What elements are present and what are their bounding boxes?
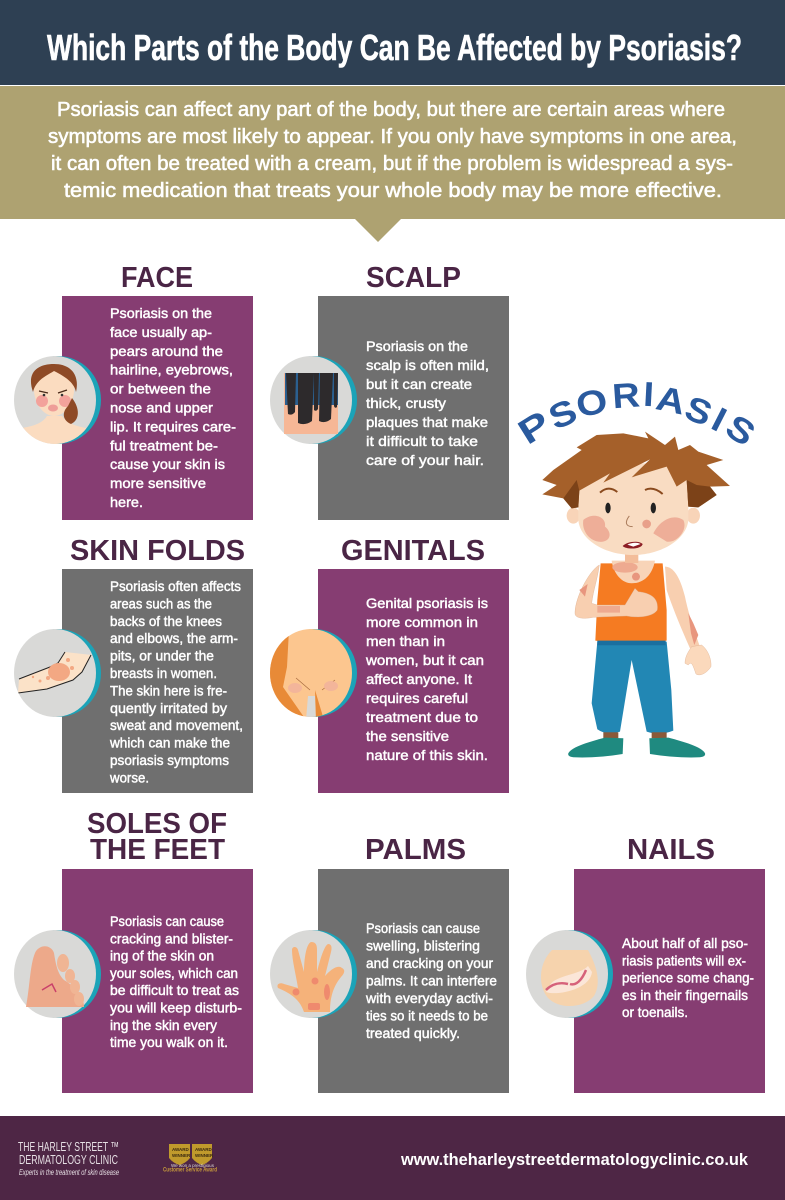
text: genitals: nature of this skin. [366, 747, 488, 763]
text: skin folds: breasts in women. [110, 665, 217, 681]
text: face: or between the [110, 381, 211, 397]
text: genitals: the sensitive [366, 728, 449, 744]
panel: scalp [270, 262, 509, 520]
icon: genitals [270, 629, 357, 720]
intro text: it can often be treated with a cream, but if the problem is widespread a sys- [51, 153, 733, 175]
illustration: boy with psoriasis [511, 374, 762, 757]
award badges: We won a prestigious [171, 1163, 215, 1168]
text: soles of the feet: you will keep disturb- [110, 1000, 242, 1016]
text: soles of the feet: cracking and blister- [110, 930, 233, 946]
text: face: more sensitive [110, 475, 206, 491]
arm and hand [575, 565, 658, 618]
text: palms: and cracking on your [366, 955, 493, 971]
footer [0, 1116, 785, 1200]
curved word: psoriasis: R [611, 375, 641, 416]
text: scalp: care of your hair. [366, 452, 484, 468]
text: palms: swelling, blistering [366, 938, 480, 954]
text: skin folds: backs of the knees [110, 613, 222, 629]
text: face: here. [110, 494, 143, 510]
panel: nails [526, 834, 765, 1093]
website url: www.theharleystreetdermatologyclinic.co.uk [400, 1151, 749, 1169]
text: skin folds [109, 578, 243, 785]
heading: genitals: GENITALS [341, 535, 485, 567]
text: face: nose and upper [110, 400, 213, 416]
curved word: psoriasis: P [511, 403, 557, 452]
header band [0, 0, 785, 85]
text: palms: treated quickly. [366, 1025, 460, 1041]
text: face: lip. It requires care- [110, 418, 236, 434]
text: face: hairline, eyebrows, [110, 362, 233, 378]
text: scalp: Psoriasis on the [366, 338, 468, 354]
clinic logo: THE HARLEY STREET ™ [18, 1139, 119, 1154]
text: genitals: affect anyone. It [366, 671, 472, 687]
intro text: symptoms are most likely to appear. If you only have symptoms in one area, [48, 126, 737, 148]
curved word: psoriasis [511, 374, 762, 454]
heading: soles of the feet: THE FEET [90, 834, 225, 866]
text: nails: perience some chang- [622, 970, 754, 986]
text: palms: with everyday activi- [365, 990, 493, 1006]
intro text: Psoriasis can affect any part of the body, but there are certain areas where [57, 99, 725, 121]
panel: genitals [270, 535, 509, 793]
curved word: psoriasis: S [543, 391, 582, 437]
text: genitals: treatment due to [366, 709, 478, 725]
text: skin folds: The skin here is fre- [110, 682, 227, 698]
text: soles of the feet: ing of the skin on [110, 948, 214, 964]
text: genitals: men than in [366, 633, 445, 649]
text: scalp: scalp is often mild, [366, 357, 489, 373]
curved word: psoriasis: S [719, 406, 762, 454]
text: genitals: Genital psoriasis is [366, 595, 488, 611]
text: skin folds: pits, or under the [110, 648, 214, 664]
curved word: psoriasis: O [572, 380, 611, 425]
panel: soles of the feet [14, 808, 253, 1093]
text: nails: riasis patients will ex- [622, 952, 746, 968]
chest skin [612, 561, 655, 583]
heading: soles of the feet: SOLES OF [87, 808, 227, 840]
clinic logo: Experts in the treatment of skin disease [19, 1167, 119, 1177]
text: skin folds: areas such as the [110, 595, 212, 611]
text: face: Psoriasis on the [110, 305, 212, 321]
clinic logo: DERMATOLOGY CLINIC [19, 1152, 118, 1167]
intro text: temic medication that treats your whole body may be more effective. [64, 180, 722, 202]
icon: foot [14, 930, 101, 1018]
shirt [595, 563, 667, 644]
panel: skin folds [14, 535, 253, 793]
curved word: psoriasis: I [642, 374, 655, 414]
text: soles of the feet: Psoriasis can cause [110, 913, 224, 929]
award badges: WINNER [195, 1153, 214, 1158]
neck [625, 552, 638, 563]
legs and shoes [568, 642, 705, 757]
text: soles of the feet [110, 913, 242, 1050]
text: face: pears around the [110, 343, 223, 359]
text: palms: Psoriasis can cause [366, 920, 480, 936]
heading: face: FACE [121, 262, 193, 294]
text: scalp: but it can create [366, 376, 472, 392]
icon: scalp [270, 356, 357, 444]
text: face [110, 305, 236, 510]
heading: nails: NAILS [627, 834, 715, 866]
text: soles of the feet: be difficult to treat as [110, 982, 239, 998]
heading: soles of the feet [87, 808, 227, 866]
heading: palms: PALMS [365, 834, 466, 866]
icon: skin folds [14, 629, 101, 717]
text: face: ful treatment be- [110, 437, 218, 453]
text: soles of the feet: ing the skin every [110, 1017, 217, 1033]
award badges: WINNER [172, 1153, 191, 1158]
icon: face [14, 356, 101, 444]
text: skin folds: Psoriasis often affects [110, 578, 241, 594]
clinic logo [18, 1139, 119, 1177]
text: genitals: women, but it can [365, 652, 484, 668]
heading: skin folds: SKIN FOLDS [70, 535, 245, 567]
panel: face [14, 262, 253, 520]
text: nails: About half of all pso- [622, 935, 748, 951]
text: scalp: it difficult to take [366, 433, 478, 449]
text: nails [622, 935, 754, 1020]
icon: hand [270, 930, 357, 1018]
intro text [48, 99, 737, 202]
text: soles of the feet: your soles, which can [110, 965, 238, 981]
text: scalp [366, 338, 489, 468]
heading: scalp: SCALP [366, 262, 461, 294]
panel: palms [270, 834, 509, 1093]
award badges: AWARD [172, 1147, 190, 1152]
text: soles of the feet: time you walk on it. [110, 1034, 228, 1050]
award badges: AWARD [195, 1147, 212, 1152]
award badges [163, 1144, 217, 1174]
hair [542, 432, 730, 508]
text: nails: or toenails. [622, 1004, 688, 1020]
text: genitals [365, 595, 488, 763]
text: face: cause your skin is [110, 456, 225, 472]
text: face: face usually ap- [110, 324, 212, 340]
curved word: psoriasis: I [706, 400, 733, 439]
head [542, 432, 730, 555]
text: genitals: more common in [366, 614, 478, 630]
text: palms: palms. It can interfere [366, 972, 497, 988]
text: palms [365, 920, 497, 1041]
arm at right [665, 567, 700, 648]
text: skin folds: and elbows, the arm- [110, 630, 238, 646]
curved word: psoriasis: S [680, 388, 717, 434]
text: skin folds: psoriasis symptoms [110, 752, 229, 768]
text: scalp: plaques that make [366, 414, 488, 430]
text: nails: es in their fingernails [622, 987, 748, 1003]
icon: nail [526, 930, 613, 1018]
curved word: psoriasis: A [653, 378, 689, 422]
text: skin folds: worse. [109, 769, 149, 785]
award badges: Customer Service Award [163, 1168, 217, 1174]
text: skin folds: sweat and movement, [110, 717, 243, 733]
text: scalp: thick, crusty [366, 395, 446, 411]
text: palms: ties so it needs to be [366, 1008, 488, 1024]
intro band with pointer [0, 86, 785, 242]
text: skin folds: quently irritated by [110, 700, 227, 716]
text: genitals: requires careful [366, 690, 468, 706]
text: skin folds: which can make the [109, 735, 230, 751]
